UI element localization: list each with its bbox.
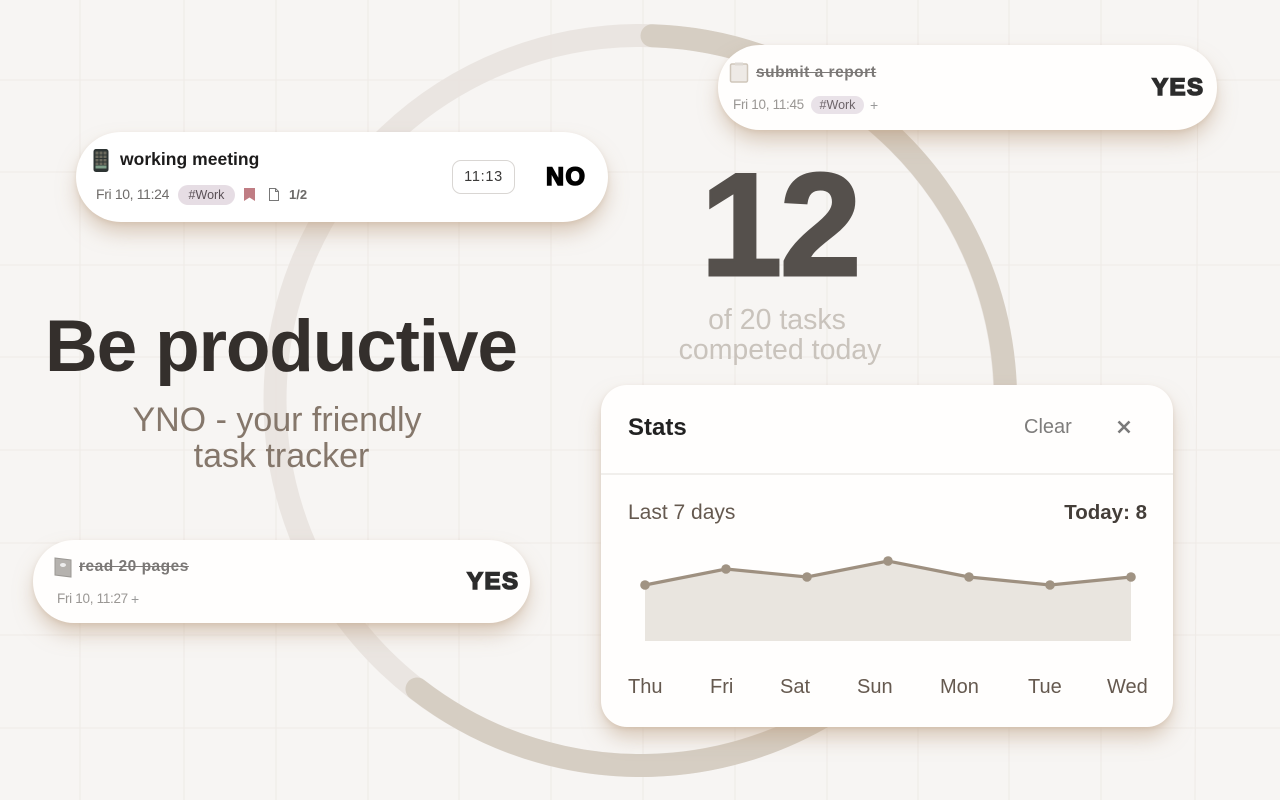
title: Be productive <box>45 306 517 387</box>
icon: book <box>54 557 72 578</box>
task title: read 20 pages <box>79 558 189 575</box>
caption: tasks completed: competed today <box>679 334 881 366</box>
tag: #Work <box>189 188 224 202</box>
caption: tasks completed: of 20 tasks <box>708 304 846 336</box>
status: yes: YES <box>1152 74 1205 101</box>
task title: working meeting <box>120 149 259 169</box>
x axis labels: Tue <box>1028 676 1062 698</box>
big number: 12 <box>701 143 859 306</box>
x axis labels: Sat <box>780 676 810 698</box>
divider <box>601 473 1173 475</box>
panel heading: Stats <box>628 414 687 441</box>
caption: tasks completed <box>679 304 882 366</box>
add button: + <box>870 97 878 113</box>
add button: + <box>131 591 139 607</box>
task card: working meeting <box>76 132 608 222</box>
subtitle: task tracker <box>194 437 369 475</box>
task title: submit a report <box>756 64 876 81</box>
date: Fri 10, 11:24 <box>96 186 169 202</box>
range label: Last 7 days <box>628 501 735 524</box>
date: Fri 10, 11:45 <box>733 97 804 112</box>
status: no: NO <box>546 163 586 191</box>
status: yes: YES <box>467 568 520 595</box>
task card: submit a report <box>718 45 1217 130</box>
x axis labels: Fri <box>710 676 733 698</box>
date: Fri 10, 11:27 <box>57 591 128 606</box>
tag <box>178 185 235 205</box>
x axis labels: Sun <box>857 676 893 698</box>
icon: clipboard <box>730 62 748 83</box>
x axis labels: Mon <box>940 676 979 698</box>
icon: bookmark <box>244 188 255 201</box>
panel: stats <box>601 385 1173 727</box>
timer: 11:13 <box>464 169 503 185</box>
subtitle <box>132 401 422 475</box>
subtitle: YNO - your friendly <box>132 401 422 439</box>
x axis labels: Wed <box>1107 676 1148 698</box>
icon: note <box>269 188 279 201</box>
icon: close <box>1118 420 1130 434</box>
subtask count: 1/2 <box>289 187 307 202</box>
tag <box>811 96 864 114</box>
x axis labels <box>628 676 1148 698</box>
x axis labels: Thu <box>628 676 662 698</box>
icon: phone <box>94 149 108 172</box>
clear button: Clear <box>1024 416 1072 438</box>
task card: read 20 pages <box>33 540 530 623</box>
line chart <box>640 556 1136 641</box>
today total: Today: 8 <box>1064 501 1147 524</box>
tag: #Work <box>820 98 855 112</box>
timer <box>452 160 515 194</box>
